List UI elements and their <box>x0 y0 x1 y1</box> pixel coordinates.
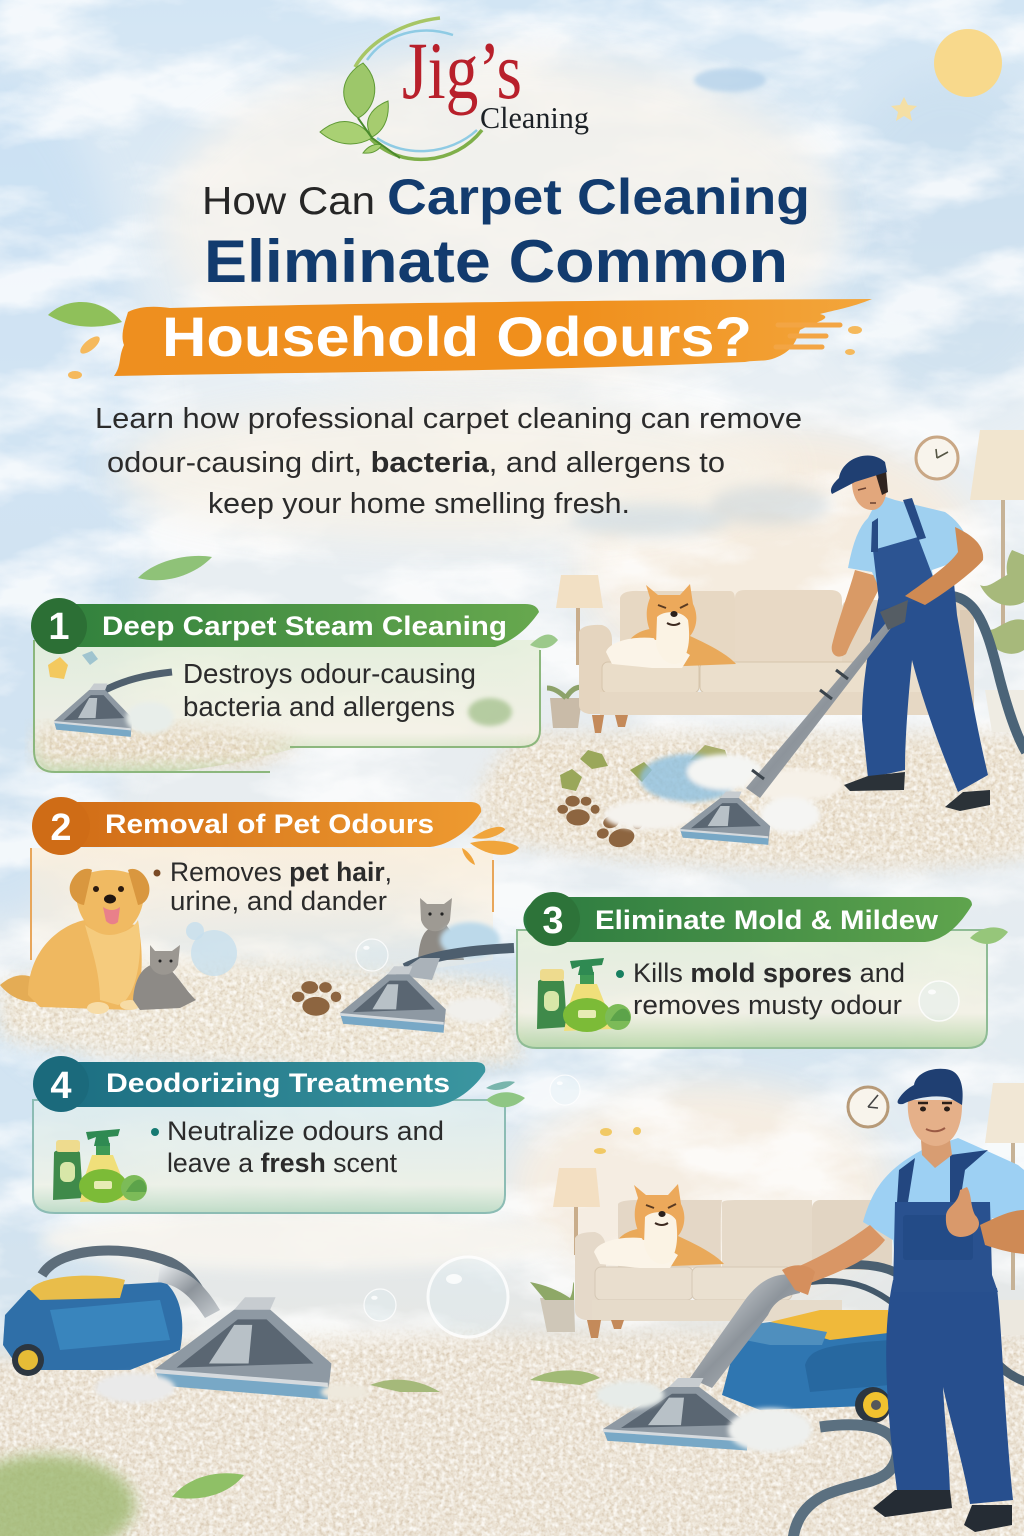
logo <box>320 18 589 159</box>
panel border <box>34 640 540 772</box>
card panel <box>34 640 540 772</box>
title <box>202 169 810 295</box>
hair <box>876 470 888 495</box>
boots <box>844 772 990 811</box>
title line 2: Eliminate Common <box>204 228 788 295</box>
lid <box>770 1310 888 1340</box>
wand <box>158 1265 220 1318</box>
torso <box>848 495 967 590</box>
front arm <box>905 527 983 605</box>
product bottles <box>537 958 631 1032</box>
bubble <box>550 1075 580 1105</box>
leaves and paw prints on floor <box>557 745 730 852</box>
grey cat <box>133 945 196 1010</box>
title line 1: How Can <box>202 180 375 223</box>
bubbles <box>186 922 388 976</box>
room scene 2 <box>530 1075 1024 1385</box>
hand on wand <box>782 1265 815 1295</box>
wand bands <box>752 670 848 779</box>
wall clock <box>848 1087 888 1127</box>
thumbs up <box>946 1187 979 1237</box>
bubbles <box>364 1257 508 1337</box>
banner title: Removal of Pet Odours <box>105 809 434 839</box>
panel borders <box>31 848 493 960</box>
banner leaves <box>530 635 558 648</box>
logo leaves <box>320 63 400 158</box>
paw print <box>292 981 341 1016</box>
floor nozzle <box>680 792 770 845</box>
vacuum machine right <box>596 1265 1024 1536</box>
number badge <box>526 892 580 946</box>
nozzle <box>155 1297 331 1399</box>
cap <box>831 455 887 494</box>
tabby cat <box>418 898 464 960</box>
wheel <box>12 1344 44 1376</box>
card body: Neutralize odours and <box>167 1116 444 1146</box>
cap <box>898 1069 963 1105</box>
card 3: eliminate mold and mildew <box>517 892 1008 1048</box>
banner title: Deodorizing Treatments <box>106 1068 450 1098</box>
card body: Kills mold spores and <box>633 958 905 988</box>
bubble <box>919 981 959 1021</box>
sofa <box>575 1200 892 1338</box>
plant pot <box>530 1282 575 1332</box>
product bottles <box>53 1129 147 1203</box>
card banner <box>523 897 972 942</box>
legs <box>886 1280 1013 1504</box>
back hose <box>813 1265 900 1275</box>
golden dog <box>0 869 149 1014</box>
foam <box>596 1381 812 1452</box>
splash <box>462 827 519 865</box>
highlighted headline banner <box>48 299 872 379</box>
torso <box>863 1138 1024 1260</box>
sofa <box>579 590 974 733</box>
room scene 1 <box>547 430 1024 852</box>
decorative leaf <box>138 556 212 580</box>
steam and foam <box>604 754 843 833</box>
card panel <box>33 1100 505 1213</box>
hose <box>42 1251 210 1310</box>
brush stroke <box>114 299 872 376</box>
lamp <box>553 1168 600 1255</box>
side table <box>998 1300 1024 1335</box>
floor hose <box>793 1425 897 1536</box>
neck <box>921 1140 952 1168</box>
headline text: Household Odours? <box>162 305 752 368</box>
face features <box>918 1103 952 1131</box>
card panel <box>517 930 987 1048</box>
wall clock <box>916 437 958 479</box>
hose <box>935 595 1024 752</box>
splash dots <box>68 326 862 379</box>
carpet floors <box>0 735 1024 1536</box>
bullet <box>151 1128 159 1136</box>
lamp <box>556 575 603 665</box>
number badge: 1 <box>48 606 70 648</box>
floor lamp <box>970 430 1024 640</box>
banner leaves <box>970 927 1008 944</box>
plant pot <box>547 687 584 728</box>
wheel <box>855 1387 891 1423</box>
logo swoosh <box>355 18 482 159</box>
logo subtitle: Cleaning <box>480 100 589 135</box>
legs <box>862 572 988 792</box>
banner title: Eliminate Mold & Mildew <box>595 905 939 935</box>
body <box>722 1320 892 1410</box>
card 1: deep carpet steam cleaning <box>31 598 558 772</box>
number badge <box>31 598 87 654</box>
card banner <box>39 1062 485 1107</box>
mini nozzle <box>48 651 174 737</box>
wand handle <box>880 600 908 630</box>
wand <box>746 610 905 798</box>
foam <box>440 922 505 1023</box>
number badge <box>33 1056 89 1112</box>
banner leaves <box>486 1081 525 1107</box>
lid <box>30 1276 125 1300</box>
card body <box>167 1116 444 1178</box>
card body: Removes pet hair, <box>170 857 392 887</box>
intro paragraph: odour-causing dirt, bacteria, and allergens to <box>107 447 725 479</box>
sofa dog <box>606 584 736 668</box>
panel <box>805 1340 890 1392</box>
nozzle <box>603 1378 750 1451</box>
number badge <box>32 797 90 855</box>
bib pocket <box>903 1215 973 1260</box>
bib <box>893 1202 998 1292</box>
card banner <box>38 802 481 847</box>
panel <box>50 1300 170 1350</box>
stain <box>468 698 512 726</box>
nozzle and hose <box>340 948 514 1033</box>
straps <box>897 1150 988 1202</box>
card body <box>170 857 392 916</box>
arm to wand <box>795 1225 885 1285</box>
carpet plant <box>530 1370 600 1385</box>
house plant <box>980 550 1024 732</box>
bullet <box>616 970 624 978</box>
card 2: removal of pet odours <box>0 797 519 1033</box>
title: Carpet Cleaning <box>387 169 810 225</box>
card panel <box>31 848 493 975</box>
bullet <box>154 870 160 876</box>
floor lamp <box>985 1083 1024 1290</box>
face <box>852 470 887 510</box>
thumbs up arm <box>980 1210 1024 1254</box>
number badge: 4 <box>50 1065 72 1107</box>
card body: bacteria and allergens <box>183 691 455 722</box>
body <box>3 1282 182 1370</box>
worker 1 vacuuming <box>680 455 1024 845</box>
vacuum machine left <box>3 1251 508 1403</box>
brush lines <box>776 325 840 347</box>
face features <box>858 488 876 503</box>
card body: removes musty odour <box>633 990 902 1020</box>
carpet strip <box>38 725 300 766</box>
straps <box>871 498 926 552</box>
boots <box>873 1490 1012 1532</box>
card body: urine, and dander <box>170 886 387 916</box>
sun <box>891 29 1002 121</box>
face <box>908 1100 962 1146</box>
card 4: deodorizing treatments <box>33 1056 525 1213</box>
number badge: 3 <box>542 900 564 942</box>
card body: leave a fresh scent <box>167 1148 397 1178</box>
intro paragraph: keep your home smelling fresh. <box>208 488 630 520</box>
sofa dog <box>594 1184 724 1268</box>
leaf left <box>48 302 122 327</box>
intro paragraph: Learn how professional carpet cleaning can remove <box>95 403 802 435</box>
card body <box>633 958 905 1020</box>
wand <box>690 1274 800 1388</box>
foliage bottom left <box>0 1380 440 1536</box>
card body: Destroys odour-causing <box>183 658 476 689</box>
bib <box>873 537 954 610</box>
banner title: Deep Carpet Steam Cleaning <box>102 611 507 641</box>
back arm <box>832 570 884 657</box>
foam <box>95 1373 369 1403</box>
card body <box>183 658 476 722</box>
logo wordmark: Jig’s <box>402 25 522 116</box>
card banner <box>42 604 539 647</box>
floating spots <box>594 1127 641 1154</box>
number badge: 2 <box>50 807 72 849</box>
intro paragraph <box>95 403 802 520</box>
worker 2 thumbs up <box>782 1069 1024 1532</box>
